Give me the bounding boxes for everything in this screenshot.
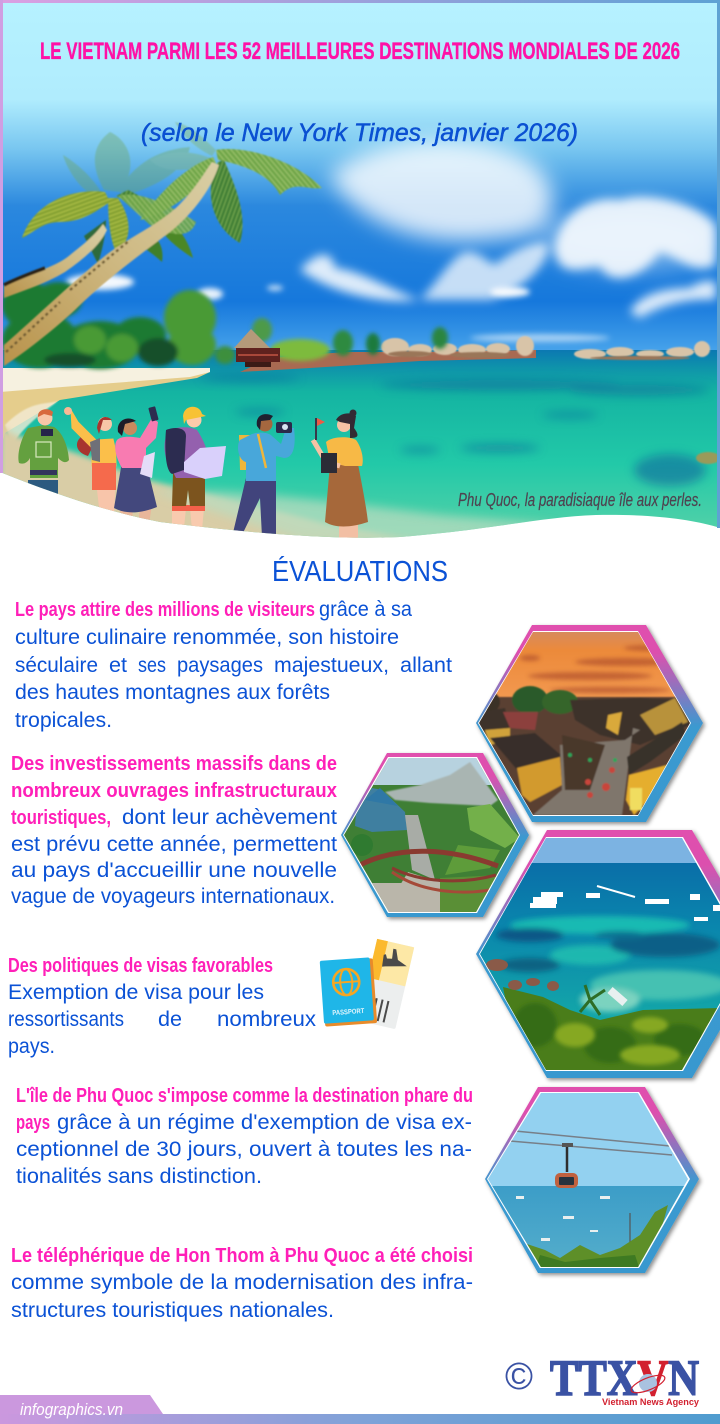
text block: investments: nombreux ouvrages infrastructuraux: [11, 780, 337, 802]
footer band: [0, 1395, 720, 1424]
text block: cable car: structures touristiques nationales.: [11, 1299, 334, 1322]
person pink top: [114, 406, 159, 530]
text block: visitors: paysages: [177, 654, 263, 677]
hero frame: [0, 0, 720, 528]
text block: visa policy: Exemption de visa pour les: [8, 981, 264, 1004]
tourists group: [18, 406, 368, 540]
text block: visitors: grâce à sa: [319, 598, 412, 621]
person yellow top: [64, 407, 116, 520]
text block: visa policy: Des politiques de visas favorables: [8, 955, 273, 977]
icon: passport: PASSPORT: [332, 1008, 365, 1017]
photo hexagon: cable car: [484, 1087, 699, 1273]
right rocks in sea: [696, 452, 720, 464]
text block: investments: Des investissements massifs dans de: [11, 753, 337, 775]
person green hoodie: [18, 409, 69, 494]
text block: Phu Quoc: L'île de Phu Quoc s'impose comme la destination phare du: [16, 1085, 473, 1107]
back trunk: [4, 224, 107, 298]
icon: passport and boarding pass: [320, 939, 414, 1029]
hero: beach photograph with wave bottom: [0, 0, 720, 545]
text block: investments: dont leur achèvement: [122, 806, 337, 829]
photo hexagon: Hoi An at sunset: [470, 625, 703, 822]
text block: investments: [11, 753, 337, 908]
icon: boarding pass: [358, 939, 414, 1029]
trees behind beach: [2, 281, 448, 369]
footer label: infographics.vn: [20, 1400, 123, 1419]
text block: investments: au pays d'accueillir une nouvelle: [11, 859, 337, 882]
section heading: ÉVALUATIONS: [272, 555, 448, 588]
text block: visa policy: nombreux: [217, 1008, 317, 1031]
text block: visitors: majestueux,: [274, 654, 389, 677]
text block: Phu Quoc: [16, 1085, 473, 1188]
text block: visa policy: de: [158, 1008, 182, 1031]
text block: visa policy: [8, 955, 317, 1058]
palm fronds and trunks: [4, 122, 322, 366]
text block: visitors: culture culinaire renommée, son histoire: [15, 626, 399, 649]
text block: Phu Quoc: tionalités sans distinction.: [16, 1165, 262, 1188]
text block: visitors: tropicales.: [15, 709, 112, 732]
faded upper fronds: [63, 122, 216, 198]
text block: visitors: et: [109, 654, 127, 677]
text block: Phu Quoc: grâce à un régime d'exemption de visa ex-: [57, 1111, 472, 1134]
photo hexagon: Sun World bridge: [340, 753, 529, 917]
text block: Phu Quoc: pays: [16, 1112, 50, 1134]
front crown fronds: [216, 149, 322, 195]
logo: TTXVN: TTXVN: [550, 1351, 699, 1407]
text block: visitors: des hautes montagnes aux forêts: [15, 681, 330, 704]
beach sand: [3, 372, 210, 439]
hut: [234, 329, 280, 367]
logo: TTXVN: Vietnam News Agency: [602, 1397, 700, 1408]
text block: investments: est prévu cette année, permettent: [11, 833, 337, 856]
text block: visitors: Le pays attire des millions de visiteurs: [15, 599, 315, 621]
text block: cable car: comme symbole de la modernisation des infra-: [11, 1271, 473, 1294]
text block: Phu Quoc: ceptionnel de 30 jours, ouvert à toutes les na-: [16, 1138, 472, 1161]
text block: investments: touristiques,: [11, 807, 111, 829]
clouds: [66, 141, 720, 342]
text block: visa policy: pays.: [8, 1035, 55, 1058]
text block: visitors: allant: [400, 654, 452, 677]
text block: visitors: ses: [138, 654, 166, 677]
back crown fronds: [22, 191, 110, 238]
front trunk: [4, 162, 219, 366]
person guide with flag: [313, 410, 368, 540]
text block: visitors: [15, 598, 452, 732]
text block: cable car: Le téléphérique de Hon Thom à Phu Quoc a été choisi: [11, 1245, 473, 1267]
text block: visitors: séculaire: [15, 654, 98, 677]
logo: copyright sign: ©: [505, 1356, 533, 1398]
person blue top with camera: [232, 414, 295, 537]
text block: cable car: [11, 1245, 473, 1322]
text block: visa policy: ressortissants: [8, 1008, 124, 1031]
text block: investments: vague de voyageurs internationaux.: [11, 885, 335, 908]
sea: [0, 350, 720, 540]
person purple top with map: [165, 407, 226, 530]
subtitle: (selon le New York Times, janvier 2026): [141, 119, 578, 147]
rocks and far shore: [240, 336, 710, 372]
photo hexagon: island bay: [476, 830, 720, 1078]
